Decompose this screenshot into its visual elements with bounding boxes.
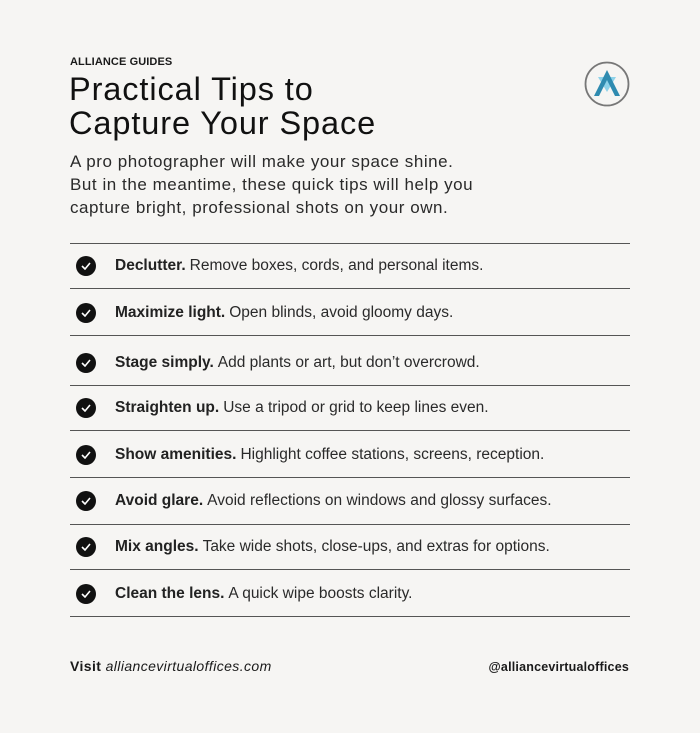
tip: declutter: Declutter. [115, 257, 186, 274]
tip: stage simply [76, 353, 480, 373]
footer website: Visit alliancevirtualoffices.com [70, 658, 272, 674]
intro text: But in the meantime, these quick tips will help you [70, 175, 473, 194]
tip: declutter [76, 256, 483, 276]
title: Capture Your Space [69, 105, 376, 141]
tip: mix angles: Take wide shots, close-ups, and extras for options. [203, 538, 550, 555]
tip: mix angles [76, 537, 550, 557]
tip: declutter: Remove boxes, cords, and personal items. [190, 257, 483, 274]
tip: avoid glare [76, 491, 552, 511]
tip: clean the lens: A quick wipe boosts clarity. [228, 585, 412, 602]
intro text: capture bright, professional shots on your own. [70, 198, 448, 217]
tip: straighten up [76, 398, 489, 418]
tip: straighten up: Use a tripod or grid to keep lines even. [223, 399, 489, 416]
eyebrow label: ALLIANCE GUIDES [70, 56, 172, 68]
tip: straighten up: Straighten up. [115, 399, 219, 416]
tip: show amenities: Show amenities. [115, 446, 236, 463]
tip: maximize light: Open blinds, avoid gloomy days. [229, 304, 453, 321]
tip: maximize light: Maximize light. [115, 304, 225, 321]
tip: stage simply: Add plants or art, but don’t overcrowd. [218, 354, 480, 371]
intro text: A pro photographer will make your space shine. [70, 152, 453, 171]
title: Practical Tips to [69, 71, 314, 107]
tip: clean the lens [76, 584, 412, 604]
footer handle: @alliancevirtualoffices [489, 660, 629, 674]
tip: mix angles: Mix angles. [115, 538, 199, 555]
logo [584, 62, 630, 106]
title [69, 71, 376, 141]
tip: avoid glare: Avoid glare. [115, 492, 203, 509]
tip: stage simply: Stage simply. [115, 354, 214, 371]
tip: clean the lens: Clean the lens. [115, 585, 224, 602]
tip: avoid glare: Avoid reflections on windows and glossy surfaces. [207, 492, 552, 509]
tip: show amenities: Highlight coffee stations, screens, reception. [240, 446, 544, 463]
tip: show amenities [76, 445, 544, 465]
intro text [70, 152, 473, 217]
tip: maximize light [76, 303, 453, 323]
